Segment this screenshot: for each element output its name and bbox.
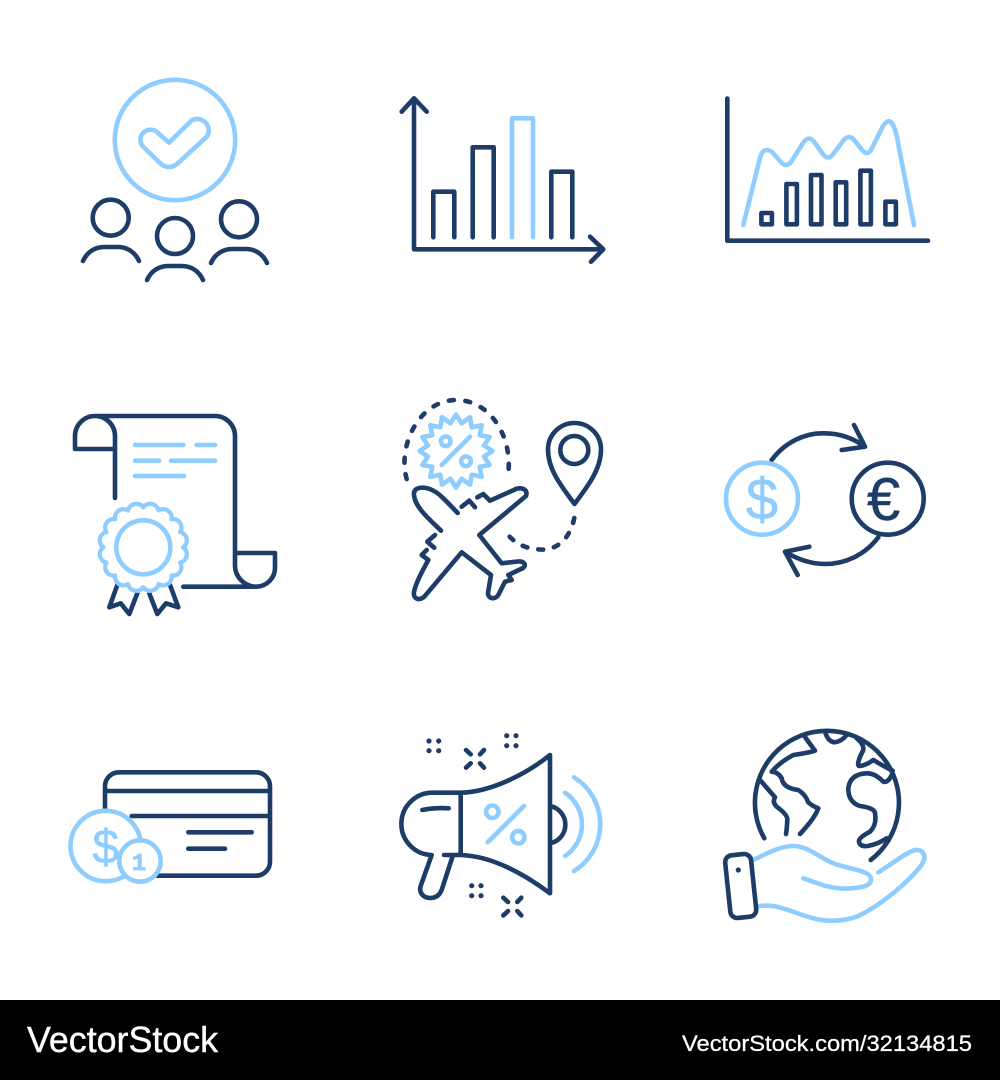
approval circle with check xyxy=(115,80,235,200)
coin one xyxy=(119,840,161,882)
coin one: 1 xyxy=(132,851,146,878)
percent sign xyxy=(486,806,524,844)
icon: certificate xyxy=(75,416,275,614)
icon: currency exchange xyxy=(726,425,924,575)
trend line xyxy=(743,121,914,225)
dollar coin xyxy=(70,811,141,881)
discount badge xyxy=(420,414,492,488)
bars xyxy=(433,147,572,237)
sparkle crosses xyxy=(466,750,521,915)
axes xyxy=(727,98,928,241)
icon: globe in hand xyxy=(724,731,924,921)
euro coin: € xyxy=(867,466,900,533)
image url: VectorStock.com/32134815 xyxy=(682,1031,972,1056)
exchange arrows xyxy=(772,425,878,575)
cuff xyxy=(724,853,757,919)
airplane xyxy=(414,488,526,599)
icon: credit card and coins xyxy=(70,772,270,882)
bars xyxy=(761,171,896,224)
globe xyxy=(755,731,899,860)
rosette seal xyxy=(100,504,187,591)
icon: team approval xyxy=(83,80,267,280)
dollar coin: $ xyxy=(746,467,778,532)
euro coin xyxy=(852,463,924,535)
dashed route xyxy=(506,518,574,550)
sparkle dots xyxy=(426,733,519,898)
footer bar xyxy=(0,1000,1000,1080)
brand name: VectorStock xyxy=(27,1019,219,1060)
location pin xyxy=(548,423,601,504)
dashed orbit xyxy=(404,400,509,479)
icon: megaphone xyxy=(401,733,600,915)
icon: bar chart with arrow axes xyxy=(402,98,603,262)
icon: infochart xyxy=(727,98,928,241)
document text lines xyxy=(135,445,215,476)
document scroll xyxy=(75,416,275,587)
horn body xyxy=(401,755,565,898)
axes xyxy=(402,98,603,262)
dollar coin: $ xyxy=(92,821,119,874)
highlighted bar xyxy=(512,118,533,237)
icon: flight discount xyxy=(404,400,601,599)
three people xyxy=(83,200,267,280)
dollar coin xyxy=(726,463,798,535)
ribbons xyxy=(109,585,178,614)
hand xyxy=(753,846,924,921)
sound waves xyxy=(565,777,600,871)
card xyxy=(105,772,270,876)
